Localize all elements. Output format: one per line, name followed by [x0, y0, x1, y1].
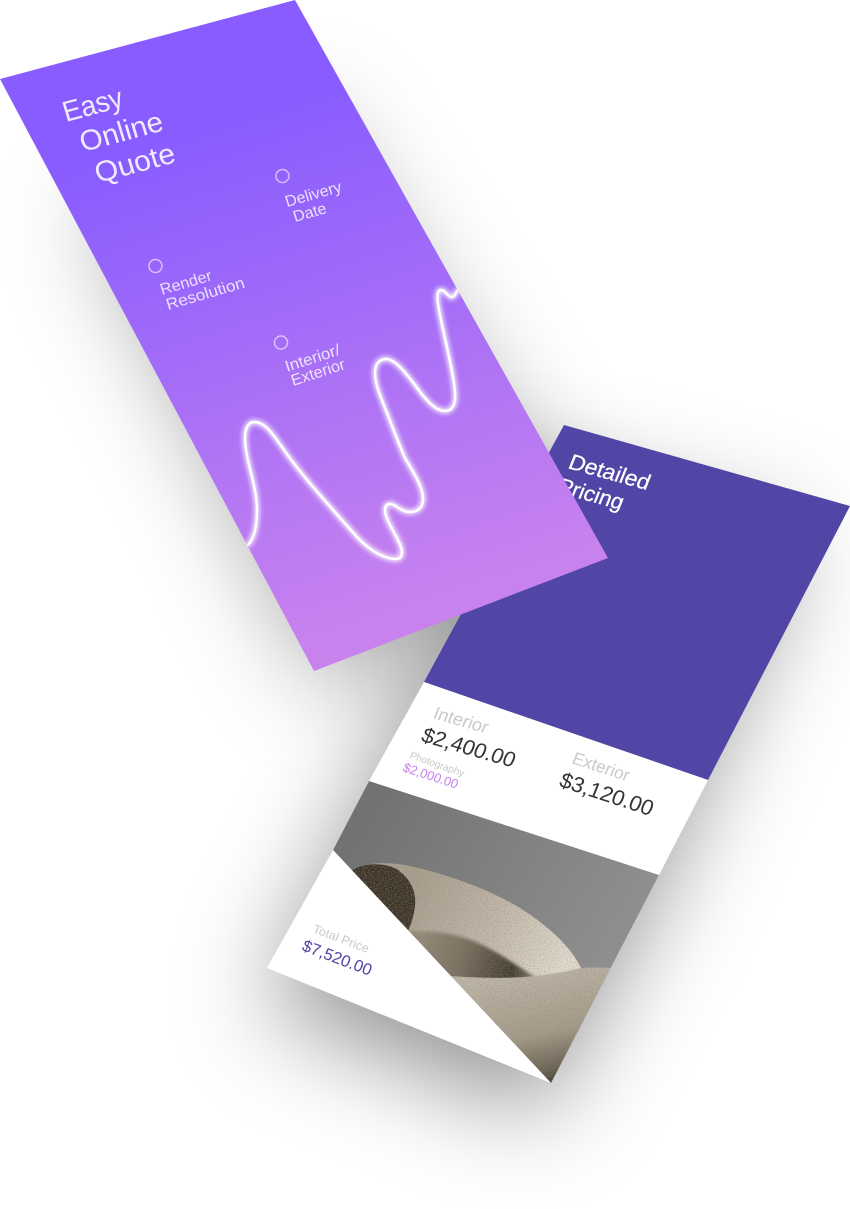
chart: glowing wave line	[245, 290, 458, 559]
price: exterior: Exterior	[570, 748, 633, 785]
option: delivery date	[276, 170, 344, 226]
price: interior: $2,400.00	[418, 723, 519, 772]
heading: detailed pricing: Detailed	[565, 449, 654, 495]
title: Online	[76, 106, 167, 159]
total price: Total Price	[311, 922, 371, 956]
white corner panel	[267, 850, 551, 1083]
panel: easy online quote card	[0, 0, 608, 671]
option: render resolution: Resolution	[164, 275, 247, 314]
title: Easy	[59, 82, 127, 129]
white price band	[369, 682, 708, 875]
shadow: lower card	[265, 470, 800, 1115]
photo: concrete sculpture	[333, 781, 659, 1090]
heading: detailed pricing: Pricing	[554, 473, 628, 514]
price: photography: Photography	[408, 751, 466, 779]
price: interior: Interior	[431, 703, 492, 737]
total price: $7,520.00	[300, 937, 374, 980]
option: delivery date: Date	[291, 200, 329, 226]
card background	[0, 0, 608, 671]
option: render resolution: Render	[158, 268, 215, 299]
option: interior/exterior	[274, 336, 348, 390]
price: exterior: $3,120.00	[556, 767, 658, 821]
heading: detailed pricing	[554, 449, 654, 514]
option: delivery date: Delivery	[283, 179, 344, 211]
title: Quote	[91, 138, 179, 190]
header block	[424, 425, 850, 780]
panel: detailed pricing card	[267, 425, 850, 1090]
price: photography: $2,000.00	[401, 760, 461, 791]
option: interior/exterior: Exterior	[289, 356, 348, 390]
option: render resolution	[149, 260, 247, 314]
title	[59, 82, 179, 190]
shadow: upper card	[90, 110, 590, 690]
option: interior/exterior: Interior/	[283, 342, 343, 376]
